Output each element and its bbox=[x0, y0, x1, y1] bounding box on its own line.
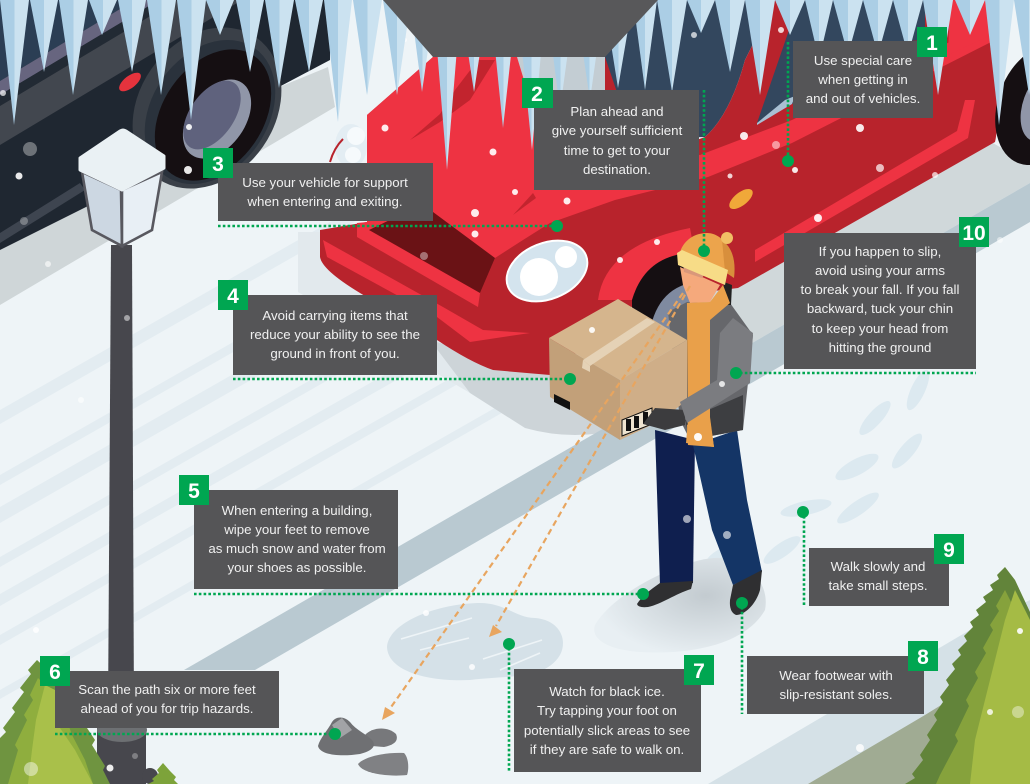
curb under cars bbox=[0, 67, 1030, 405]
text 8: slip-resistant soles. bbox=[779, 687, 893, 702]
box 6 bbox=[55, 671, 279, 728]
sight-line arrows bbox=[382, 286, 690, 720]
badge 4 bbox=[218, 280, 248, 310]
black ice puddle bbox=[387, 603, 563, 680]
sleeve bbox=[680, 318, 753, 423]
text 7: Watch for black ice. bbox=[549, 684, 665, 699]
text 4: ground in front of you. bbox=[270, 346, 400, 361]
text 2: give yourself sufficient bbox=[552, 123, 683, 138]
icicles bbox=[0, 0, 1030, 170]
text 2: destination. bbox=[583, 162, 651, 177]
window trim bbox=[757, 96, 795, 125]
man with box bbox=[549, 232, 766, 653]
top banner bbox=[383, 0, 658, 57]
footprints bbox=[705, 367, 934, 568]
face shade bbox=[683, 262, 706, 278]
callout 7 bbox=[503, 638, 714, 772]
badge 10 bbox=[959, 217, 989, 247]
text 10 bbox=[801, 244, 959, 355]
text 6: ahead of you for trip hazards. bbox=[81, 701, 253, 716]
badge 8: 8 bbox=[917, 646, 929, 669]
indicator light bbox=[726, 185, 756, 213]
box 2 bbox=[534, 90, 699, 190]
text 10: to break your fall. If you fall bbox=[801, 282, 959, 297]
scarf bbox=[686, 285, 730, 447]
connector 2 bbox=[698, 90, 710, 257]
text 2 bbox=[552, 104, 683, 177]
lamp snow cap bbox=[80, 130, 164, 190]
front wheel bbox=[632, 253, 690, 345]
text 7: if they are safe to walk on. bbox=[530, 742, 684, 757]
text 4: Avoid carrying items that bbox=[262, 308, 408, 323]
text 2: Plan ahead and bbox=[570, 104, 664, 119]
headlight bbox=[498, 229, 596, 313]
badge 9 bbox=[934, 534, 964, 564]
scarf end bbox=[687, 417, 714, 447]
rear panel bbox=[948, 0, 1002, 55]
connector 8 bbox=[736, 597, 748, 714]
text 3 bbox=[242, 175, 408, 209]
badge 1 bbox=[917, 27, 947, 57]
connector 5 bbox=[194, 588, 649, 600]
text 10: to keep your head from bbox=[812, 321, 948, 336]
left tree bbox=[0, 660, 110, 784]
jacket hem bbox=[685, 395, 743, 440]
badge 6 bbox=[40, 656, 70, 686]
badge 2 bbox=[522, 78, 553, 108]
callout 9 bbox=[797, 506, 964, 606]
face bbox=[680, 267, 720, 303]
badge 1: 1 bbox=[926, 32, 938, 55]
badge 7: 7 bbox=[693, 660, 705, 683]
text 9: Walk slowly and bbox=[831, 559, 925, 574]
ground shadow bbox=[594, 558, 766, 653]
dark car, top left bbox=[0, 0, 330, 250]
small crease bbox=[513, 193, 536, 215]
shadow under red car bbox=[298, 232, 655, 435]
right tree bbox=[905, 567, 1030, 784]
far curb and grass, bottom right bbox=[708, 600, 1030, 784]
wheel arch bbox=[598, 228, 695, 300]
rocks bbox=[318, 718, 408, 776]
text 5: When entering a building, bbox=[222, 503, 372, 518]
box handling icons bbox=[622, 408, 652, 436]
windshield reflection bbox=[517, 57, 605, 100]
box 7 bbox=[514, 669, 701, 772]
pole bbox=[108, 245, 134, 715]
grille bbox=[369, 212, 495, 293]
text 10: backward, tuck your chin bbox=[807, 301, 953, 316]
box 3 bbox=[218, 163, 433, 221]
badge 7 bbox=[684, 655, 714, 685]
trees bbox=[0, 567, 1030, 784]
text 1: when getting in bbox=[817, 72, 908, 87]
box 4 bbox=[233, 295, 437, 375]
rear wheel bbox=[979, 32, 1030, 178]
text 9: take small steps. bbox=[828, 578, 928, 593]
text 10: hitting the ground bbox=[829, 340, 931, 355]
badge 5: 5 bbox=[188, 480, 200, 503]
badge 6: 6 bbox=[49, 661, 61, 684]
lower bumper strip bbox=[323, 240, 530, 342]
text 8 bbox=[779, 668, 893, 702]
callout 5 bbox=[179, 475, 649, 600]
text 10: If you happen to slip, bbox=[819, 244, 941, 259]
text 5: as much snow and water from bbox=[208, 541, 386, 556]
pole base bbox=[97, 718, 158, 784]
box 1 bbox=[793, 41, 933, 118]
text 1: and out of vehicles. bbox=[806, 91, 920, 106]
badge 9: 9 bbox=[943, 539, 955, 562]
text 1: Use special care bbox=[814, 53, 912, 68]
hood bbox=[357, 22, 995, 307]
side window bbox=[757, 0, 925, 123]
right leg bbox=[693, 430, 762, 585]
box 9 bbox=[809, 548, 949, 606]
car body bbox=[320, 0, 1002, 375]
connector 9 bbox=[797, 506, 809, 606]
badge 10: 10 bbox=[962, 222, 986, 245]
torso bbox=[668, 302, 753, 440]
door sill strip bbox=[755, 100, 975, 262]
text 7: Try tapping your foot on bbox=[537, 703, 677, 718]
text 4: reduce your ability to see the bbox=[250, 327, 420, 342]
text 8: Wear footwear with bbox=[779, 668, 893, 683]
badge 4: 4 bbox=[227, 285, 239, 308]
text 3: Use your vehicle for support bbox=[242, 175, 408, 190]
connector 7 bbox=[503, 638, 515, 772]
box 5 bbox=[194, 490, 398, 589]
text 4 bbox=[250, 308, 420, 361]
badge 3: 3 bbox=[212, 153, 224, 176]
shoes bbox=[637, 570, 762, 615]
callout 6 bbox=[40, 656, 341, 740]
box label bbox=[554, 394, 570, 410]
lantern glass bbox=[82, 172, 162, 246]
lamp post bbox=[80, 130, 164, 784]
text 5 bbox=[208, 503, 386, 575]
connector 4 bbox=[233, 373, 576, 385]
glove bbox=[643, 408, 685, 430]
wheel hub bbox=[648, 283, 690, 345]
text 10: avoid using your arms bbox=[815, 263, 945, 278]
windshield bbox=[600, 0, 775, 140]
badge 5 bbox=[179, 475, 209, 505]
box bbox=[549, 299, 687, 440]
road shadow band bbox=[184, 183, 1030, 670]
text 5: your shoes as possible. bbox=[228, 560, 366, 575]
connector 3 bbox=[218, 220, 563, 232]
far headlight bbox=[330, 124, 367, 168]
hat bbox=[677, 232, 735, 285]
text 7: potentially slick areas to see bbox=[524, 723, 690, 738]
text 5: wipe your feet to remove bbox=[223, 522, 370, 537]
box 8 bbox=[747, 656, 924, 714]
text 1 bbox=[806, 53, 920, 106]
text 7 bbox=[524, 684, 690, 757]
connector 10 bbox=[730, 367, 976, 379]
badge 3 bbox=[203, 148, 233, 178]
small tree bbox=[148, 763, 178, 784]
hood crease bbox=[410, 60, 495, 140]
callout 8 bbox=[736, 597, 938, 714]
left leg bbox=[655, 430, 695, 585]
text 3: when entering and exiting. bbox=[246, 194, 403, 209]
red car bbox=[320, 0, 1030, 375]
connector 1 bbox=[782, 42, 794, 167]
connector 6 bbox=[55, 728, 341, 740]
callout 2 bbox=[522, 78, 710, 257]
callout 3 bbox=[203, 148, 563, 232]
callout 1 bbox=[782, 27, 947, 167]
hair bbox=[722, 282, 732, 305]
callout 10 bbox=[730, 217, 989, 379]
text 6 bbox=[78, 682, 256, 716]
badge 2: 2 bbox=[531, 83, 543, 106]
text 6: Scan the path six or more feet bbox=[78, 682, 256, 697]
badge 8 bbox=[908, 641, 938, 671]
text 2: time to get to your bbox=[564, 143, 671, 158]
box 10 bbox=[784, 233, 976, 369]
callout 4 bbox=[218, 280, 576, 385]
text 9 bbox=[828, 559, 928, 593]
